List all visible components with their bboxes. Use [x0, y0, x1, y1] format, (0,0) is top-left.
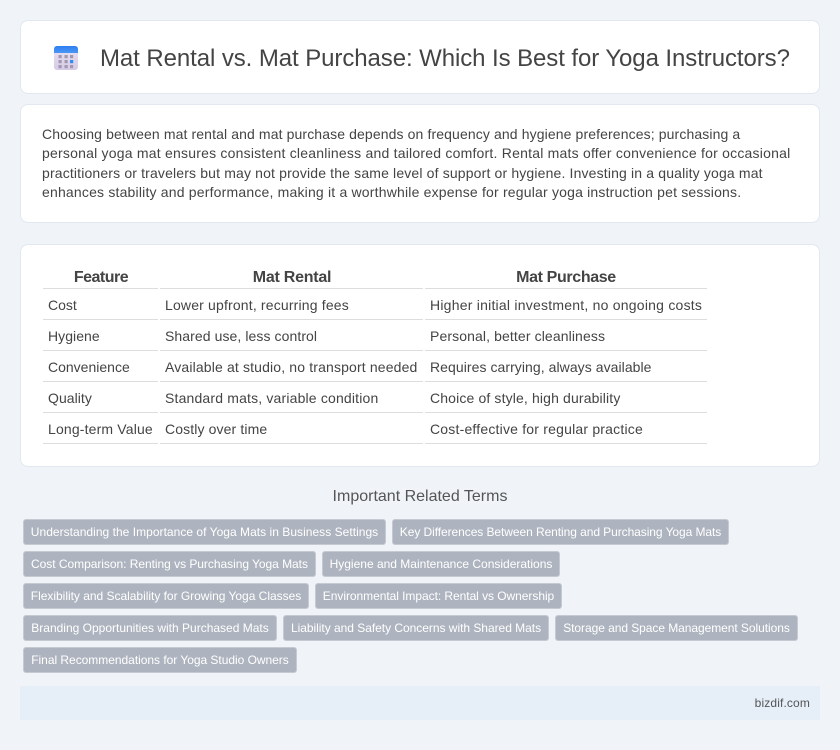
icon: calendar [54, 46, 78, 70]
tag [23, 647, 297, 673]
tag [392, 519, 729, 545]
tag [23, 519, 386, 545]
row: convenience: Convenience [48, 359, 130, 375]
row: convenience: Requires carrying, always available [430, 359, 652, 375]
footer [20, 686, 820, 720]
row: long-term value: Costly over time [165, 421, 267, 437]
heading: related terms: Important Related Terms [333, 488, 507, 505]
row: quality [48, 390, 620, 406]
title: Mat Rental vs. Mat Purchase: Which Is Best for Yoga Instructors? [100, 45, 790, 72]
table header: Mat Purchase [516, 269, 616, 286]
panel: comparison table [20, 244, 820, 467]
tag: Environmental Impact: Rental vs Ownership [323, 589, 554, 603]
tag: Understanding the Importance of Yoga Mats in Business Settings [31, 525, 378, 539]
table header: Mat Rental [253, 269, 331, 286]
panel: introduction [20, 104, 820, 223]
tag [555, 615, 798, 641]
tag [322, 551, 560, 577]
tag: Storage and Space Management Solutions [563, 621, 790, 635]
intro text [42, 126, 790, 200]
row: quality: Quality [48, 390, 92, 406]
panel: header [20, 20, 820, 94]
intro text: personal yoga mat ensures consistent cleanliness and tailored comfort. Rental mats offer convenience for occasional [42, 145, 790, 161]
row: cost: Cost [48, 297, 77, 313]
tag [23, 551, 316, 577]
intro text: enhances stability and performance, making it a worthwhile expense for regular yoga instruction pet sessions. [42, 184, 741, 200]
row: convenience: Available at studio, no transport needed [165, 359, 417, 375]
row: cost: Lower upfront, recurring fees [165, 297, 349, 313]
row: quality: Choice of style, high durability [430, 390, 620, 406]
row: hygiene: Hygiene [48, 328, 100, 344]
row: hygiene [48, 328, 605, 344]
tag: Liability and Safety Concerns with Shared Mats [291, 621, 541, 635]
row: long-term value: Cost-effective for regular practice [430, 421, 643, 437]
tag: Flexibility and Scalability for Growing Yoga Classes [31, 589, 301, 603]
tag: Hygiene and Maintenance Considerations [330, 557, 552, 571]
row: quality: Standard mats, variable condition [165, 390, 378, 406]
intro text: Choosing between mat rental and mat purchase depends on frequency and hygiene preferences; purchasing a [42, 126, 740, 142]
table header [74, 269, 616, 286]
row: hygiene: Personal, better cleanliness [430, 328, 605, 344]
row: cost [48, 297, 702, 313]
table header: Feature [74, 269, 128, 286]
row: cost: Higher initial investment, no ongoing costs [430, 297, 702, 313]
row: hygiene: Shared use, less control [165, 328, 317, 344]
tag: Branding Opportunities with Purchased Mats [31, 621, 269, 635]
intro text: practitioners or travelers but may not provide the same level of support or hygiene. Investing in a quality yoga mat [42, 165, 763, 181]
tag list [23, 519, 798, 673]
row: long-term value [48, 421, 643, 437]
tag [315, 583, 562, 609]
tag: Key Differences Between Renting and Purchasing Yoga Mats [400, 525, 721, 539]
tag [23, 615, 277, 641]
tag: Cost Comparison: Renting vs Purchasing Yoga Mats [31, 557, 308, 571]
tag [283, 615, 549, 641]
tag: Final Recommendations for Yoga Studio Owners [31, 653, 289, 667]
row: long-term value: Long-term Value [48, 421, 153, 437]
footer source: bizdif.com [755, 696, 810, 710]
row: convenience [48, 359, 652, 375]
tag [23, 583, 309, 609]
